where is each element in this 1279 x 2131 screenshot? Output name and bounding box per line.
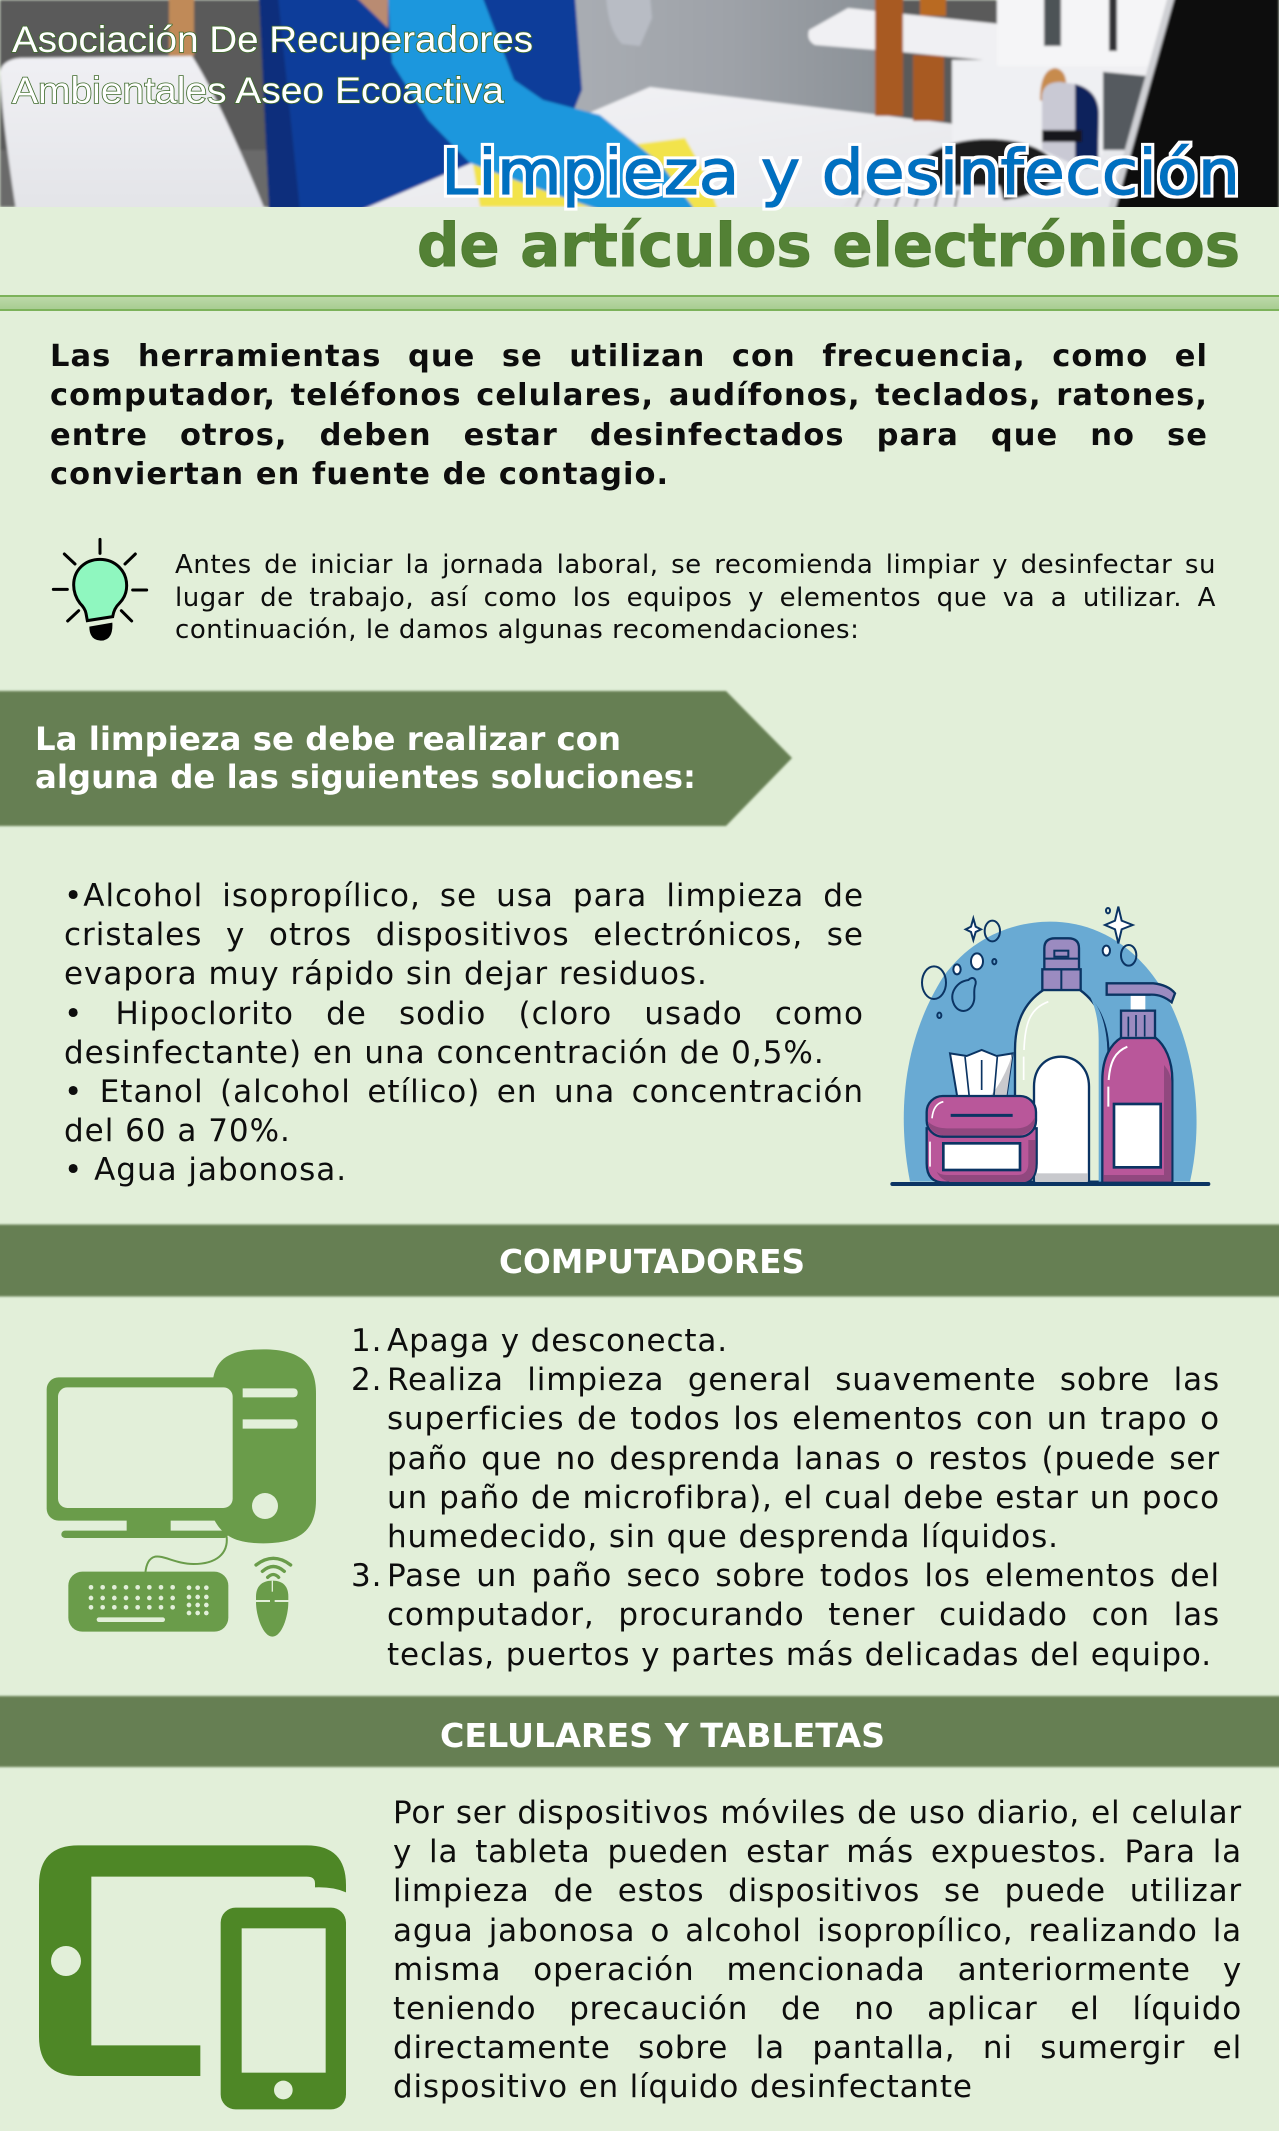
- numbered list: computer cleaning steps: [351, 1323, 1220, 1673]
- organization name: Ambientales Aseo Ecoactiva: [12, 70, 504, 111]
- header photo: cleaning a desk with a blue glove: [0, 0, 1279, 207]
- list: cleaning solutions: cristales y otros dispositivos electrónicos, se: [64, 917, 864, 953]
- numbered list: computer cleaning steps: 3.: [351, 1558, 382, 1594]
- header divider band: [0, 295, 1279, 311]
- organization name: Asociación De Recuperadores: [12, 19, 533, 60]
- intro paragraph: Las herramientas que se utilizan con frecuencia, como el: [50, 339, 1208, 374]
- numbered list: computer cleaning steps: humedecido, sin que desprenda líquidos.: [387, 1519, 1059, 1555]
- list: cleaning solutions: • Hipoclorito de sodio (cloro usado como: [64, 996, 864, 1032]
- list: cleaning solutions: •Alcohol isopropílico, se usa para limpieza de: [64, 878, 864, 914]
- paragraph: mobile device cleaning: dispositivo en líquido desinfectante: [393, 2069, 973, 2105]
- paragraph: mobile device cleaning: teniendo precaución de no aplicar el líquido: [393, 1991, 1242, 2027]
- icon: desktop computer: [46, 1349, 316, 1637]
- paragraph: mobile device cleaning: limpieza de estos dispositivos se puede utilizar: [393, 1873, 1242, 1909]
- intro paragraph: [50, 339, 1208, 492]
- arrow banner: solutions heading: La limpieza se debe realizar con: [35, 720, 621, 758]
- recommendation paragraph: continuación, le damos algunas recomendaciones:: [175, 615, 859, 645]
- icon: light bulb: [52, 538, 148, 641]
- numbered list: computer cleaning steps: paño que no desprenda lanas o restos (puede ser: [387, 1441, 1220, 1477]
- numbered list: computer cleaning steps: computador, procurando tener cuidado con las: [387, 1597, 1220, 1633]
- paragraph: mobile device cleaning: y la tableta pueden estar más expuestos. Para la: [393, 1834, 1242, 1870]
- section banner: celulares y tabletas: CELULARES Y TABLETAS: [440, 1716, 885, 1755]
- numbered list: computer cleaning steps: Pase un paño seco sobre todos los elementos del: [387, 1558, 1220, 1594]
- title line 1: Limpieza y desinfección: [441, 136, 1240, 209]
- section banner: celulares y tabletas: [0, 1694, 1279, 1768]
- intro paragraph: computador, teléfonos celulares, audífonos, teclados, ratones,: [50, 378, 1208, 413]
- intro paragraph: conviertan en fuente de contagio.: [50, 457, 669, 492]
- list: cleaning solutions: • Agua jabonosa.: [64, 1152, 347, 1188]
- paragraph: mobile device cleaning: misma operación mencionada anteriormente y: [393, 1952, 1242, 1988]
- paragraph: mobile device cleaning: [393, 1795, 1242, 2105]
- list: cleaning solutions: [64, 878, 864, 1188]
- numbered list: computer cleaning steps: Apaga y desconecta.: [387, 1323, 728, 1359]
- recommendation paragraph: [175, 550, 1216, 645]
- intro paragraph: entre otros, deben estar desinfectados para que no se: [50, 418, 1208, 453]
- numbered list: computer cleaning steps: 2.: [351, 1362, 382, 1398]
- paragraph: mobile device cleaning: directamente sobre la pantalla, ni sumergir el: [393, 2030, 1242, 2066]
- numbered list: computer cleaning steps: Realiza limpieza general suavemente sobre las: [387, 1362, 1220, 1398]
- illustration: cleaning products: [890, 906, 1210, 1186]
- list: cleaning solutions: del 60 a 70%.: [64, 1113, 291, 1149]
- recommendation paragraph: lugar de trabajo, así como los equipos y elementos que va a utilizar. A: [175, 582, 1216, 612]
- numbered list: computer cleaning steps: un paño de microfibra), el cual debe estar un poco: [387, 1480, 1220, 1516]
- list: cleaning solutions: evapora muy rápido sin dejar residuos.: [64, 956, 708, 992]
- recommendation paragraph: Antes de iniciar la jornada laboral, se recomienda limpiar y desinfectar su: [175, 550, 1216, 580]
- section banner: computadores: COMPUTADORES: [499, 1242, 805, 1281]
- paragraph: mobile device cleaning: Por ser dispositivos móviles de uso diario, el celular: [393, 1795, 1242, 1831]
- arrow banner: solutions heading: alguna de las siguientes soluciones:: [35, 758, 696, 796]
- list: cleaning solutions: • Etanol (alcohol etílico) en una concentración: [64, 1074, 864, 1110]
- numbered list: computer cleaning steps: superficies de todos los elementos con un trapo o: [387, 1401, 1220, 1437]
- section banner: computadores: [0, 1223, 1279, 1298]
- arrow banner: solutions heading: [0, 690, 793, 828]
- numbered list: computer cleaning steps: 1.: [351, 1323, 382, 1359]
- list: cleaning solutions: desinfectante) en una concentración de 0,5%.: [64, 1035, 825, 1071]
- numbered list: computer cleaning steps: teclas, puertos y partes más delicadas del equipo.: [387, 1637, 1212, 1673]
- paragraph: mobile device cleaning: agua jabonosa o alcohol isopropílico, realizando la: [393, 1913, 1242, 1949]
- icon: tablet and phone: [39, 1845, 346, 2110]
- title line 2: de artículos electrónicos: [417, 211, 1240, 281]
- organization name: [10, 19, 533, 111]
